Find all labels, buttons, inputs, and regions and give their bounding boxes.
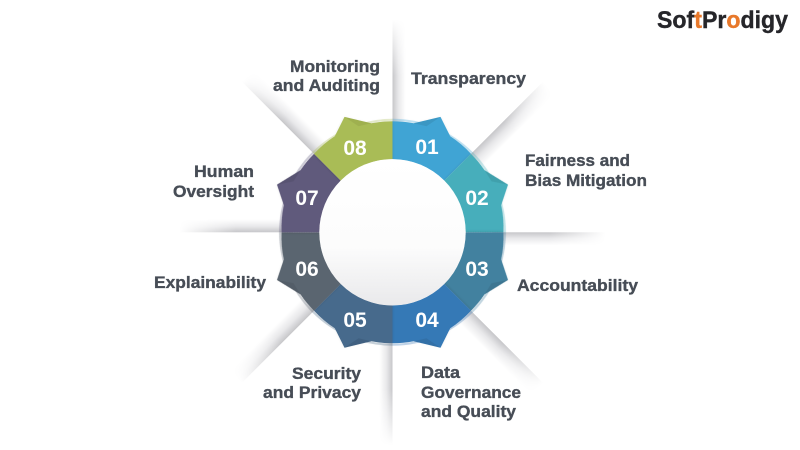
label: Data Governance and Quality: Governance (421, 384, 521, 402)
label: Data Governance and Quality (421, 364, 521, 421)
label: Monitoring and Auditing: and Auditing (273, 77, 380, 95)
label: Human Oversight: Oversight (173, 183, 255, 201)
label: Security and Privacy: Security (292, 365, 362, 383)
segment 03: 03 (465, 258, 489, 281)
segment 01 (392, 117, 472, 181)
label: Data Governance and Quality: Data (421, 364, 461, 382)
label: Security and Privacy: and Privacy (263, 384, 362, 402)
label: Data Governance and Quality: and Quality (421, 403, 517, 421)
centre disc (319, 159, 466, 306)
segment 02: 02 (465, 187, 489, 210)
segment 07 (255, 151, 356, 252)
segment 01: 01 (415, 136, 439, 159)
label: Human Oversight: Human (194, 163, 254, 181)
label: Monitoring and Auditing: Monitoring (290, 58, 380, 76)
label: Monitoring and Auditing (273, 58, 380, 95)
segment 06 (255, 213, 356, 314)
segment 02 (429, 151, 530, 252)
label: Transparency: Transparency (411, 70, 527, 88)
segment 06: 06 (295, 258, 319, 281)
label: Security and Privacy (263, 365, 362, 402)
label: Accountability: Accountability (517, 277, 639, 295)
segment 05: 05 (343, 309, 367, 332)
label: Fairness and Bias Mitigation (525, 152, 647, 190)
segment 08 (313, 117, 392, 181)
segment 04: 04 (415, 309, 439, 332)
segment 05 (313, 284, 392, 348)
label: Explainability: Explainability (154, 274, 267, 292)
logo: SoftProdigy: SoftProdigy (657, 7, 789, 34)
segment 04 (392, 284, 472, 348)
segment 08: 08 (343, 137, 367, 160)
segment 07: 07 (295, 187, 319, 210)
radial fold shadows (180, 19, 606, 445)
label: Fairness and Bias Mitigation: Fairness and (525, 152, 630, 170)
label: Fairness and Bias Mitigation: Bias Mitigation (525, 172, 647, 190)
segment 03 (429, 213, 530, 314)
label: Human Oversight (173, 163, 255, 201)
